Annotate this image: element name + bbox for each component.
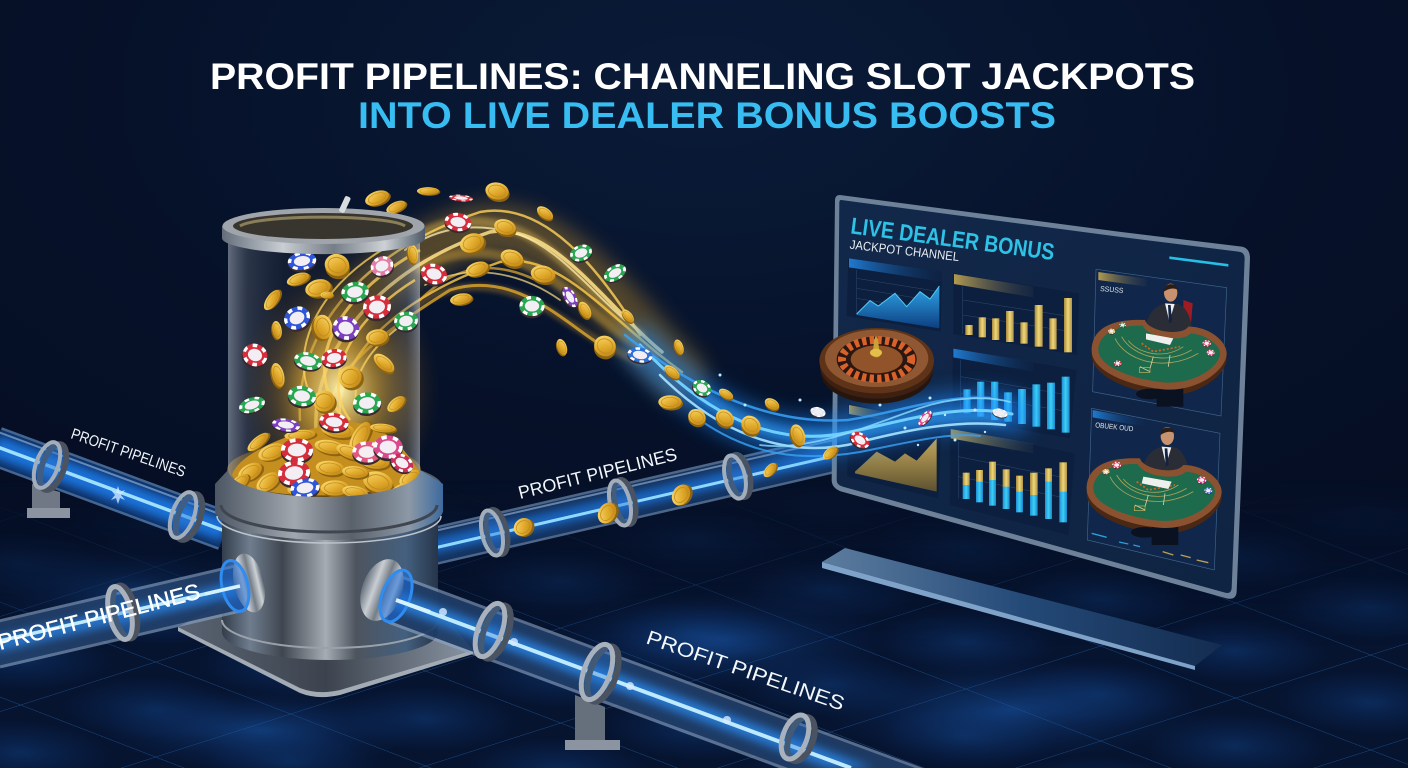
live table panel 1 [1092, 269, 1227, 416]
escaping silver coin [338, 195, 351, 213]
swirl lines [304, 240, 420, 420]
falling coins [261, 244, 420, 416]
flying coins and chips [363, 181, 841, 480]
live table panel 1: SSUSS [1100, 284, 1124, 295]
top ring [222, 226, 425, 254]
glass body [228, 238, 420, 498]
dashboard stand [822, 548, 1222, 670]
pipe: back right [430, 439, 838, 558]
collar front [215, 470, 443, 540]
blue energy stream [625, 335, 1012, 456]
live table panel 2: OBUEK OUD [1095, 420, 1134, 433]
machine base [215, 442, 443, 660]
base plate [178, 605, 473, 697]
screen frame [832, 195, 1250, 599]
title [210, 56, 1195, 136]
coins in back right pipe [510, 480, 696, 541]
glass cylinder [215, 195, 443, 543]
pipe support: back left [27, 484, 70, 518]
falling chips [237, 250, 419, 435]
label: front right pipe: PROFIT PIPELINES [643, 627, 847, 715]
number ring [842, 340, 911, 379]
chips crossing into the screen [809, 405, 1009, 453]
label: front left pipe: PROFIT PIPELINES [0, 579, 203, 655]
pipe: front left [0, 550, 270, 645]
bar chart: gold [953, 273, 1079, 355]
label: back left pipe: PROFIT PIPELINES [69, 426, 188, 481]
roulette wheel [819, 328, 934, 404]
floor grid [0, 494, 1408, 768]
coin pile [228, 417, 426, 503]
area chart: blue [847, 258, 942, 332]
inner glow [240, 265, 440, 515]
wheel stack [821, 340, 933, 404]
dashboard subheading: JACKPOT CHANNEL [849, 238, 960, 264]
golden stream of coins [300, 211, 682, 430]
live table panel 2 [1087, 408, 1222, 570]
accent bar [1169, 256, 1228, 267]
dashboard heading: LIVE DEALER BONUS [849, 213, 1056, 265]
pipe: back left [0, 432, 225, 543]
label: back right pipe: PROFIT PIPELINES [516, 444, 679, 503]
cylinder back rim [229, 216, 417, 248]
title line 2: INTO LIVE DEALER BONUS BOOSTS [358, 95, 1056, 136]
pipe: front right [352, 553, 923, 768]
pipe support: front right [565, 695, 620, 750]
bar chart: cyan [953, 348, 1077, 438]
area chart: gold [847, 403, 942, 498]
dashboard screen [832, 195, 1250, 599]
bar chart: stacked [950, 428, 1075, 535]
title line 1: PROFIT PIPELINES: CHANNELING SLOT JACKPOTS [210, 56, 1195, 97]
wheel spindle [873, 335, 880, 357]
